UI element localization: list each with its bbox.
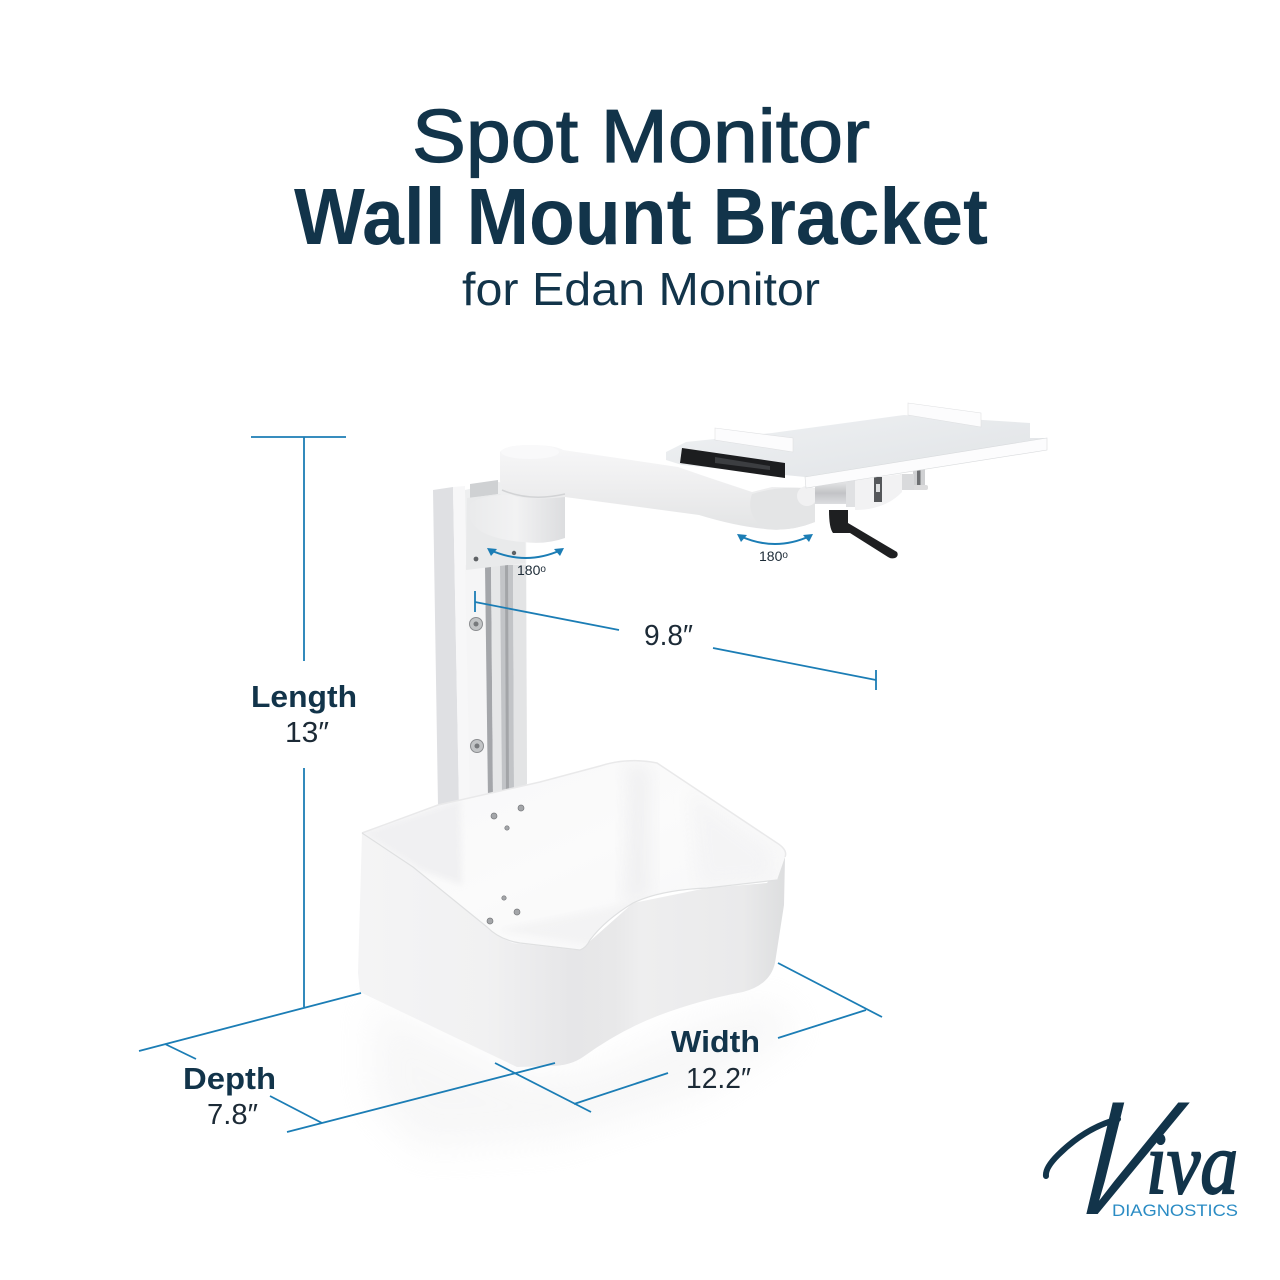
logo script wordmark V: V [1035, 1067, 1209, 1249]
interior shading [374, 781, 644, 888]
bin screws [487, 805, 524, 924]
logo script wordmark iva: iva [1146, 1116, 1238, 1213]
label: width: Width [671, 1024, 760, 1059]
rotation label: wall hub: o [540, 564, 546, 575]
cylinder end cap [797, 486, 817, 506]
lower hub [467, 493, 565, 543]
mounting plate [466, 494, 525, 570]
rotation label: arm hub: 180 [759, 548, 782, 564]
label: width [671, 1024, 760, 1095]
dimension: length [251, 437, 346, 1007]
dimension: width [495, 963, 882, 1112]
label: depth [183, 1061, 276, 1131]
label: arm reach: 9.8″ [644, 620, 693, 652]
dimension: arm reach [475, 591, 876, 690]
label: length: Length [251, 679, 357, 714]
subheading: for Edan Monitor: for Edan Monitor [462, 263, 820, 315]
heading: Spot Monitor: Spot Monitor [412, 94, 870, 178]
logo decorative swash [1046, 1119, 1118, 1176]
rotation arrow: arm hub [737, 534, 813, 544]
arm body [500, 445, 815, 530]
label: depth: 7.8″ [207, 1099, 258, 1131]
rail screws [470, 618, 484, 752]
bin interior [362, 761, 786, 950]
bin exterior [358, 833, 785, 1067]
clamp assembly [815, 469, 928, 510]
wall rail [433, 480, 527, 806]
clamp slot [874, 477, 882, 502]
rear bumper [908, 403, 981, 427]
label: length [251, 679, 357, 749]
bin rim [362, 761, 786, 857]
chrome shaft [815, 482, 849, 504]
rotation label: arm hub: o [782, 550, 788, 561]
heading: Wall Mount Bracket: Wall Mount Bracket [294, 172, 988, 261]
product: floor shadow under bin [372, 1000, 800, 1150]
swing arm [467, 445, 817, 543]
front bumper [715, 428, 793, 452]
tray body [666, 415, 1047, 488]
rotation arrow: wall hub [487, 548, 564, 558]
label: depth: Depth [183, 1061, 276, 1096]
tray front lip [805, 438, 1047, 488]
logo tagline: DIAGNOSTICS [1112, 1201, 1238, 1220]
locking pin [913, 469, 925, 487]
locking handle [829, 510, 898, 558]
storage bin [358, 761, 786, 1067]
top hub highlight [501, 445, 559, 459]
label: length: 13″ [285, 717, 329, 749]
far cylinder [750, 488, 815, 530]
hub seam [502, 490, 565, 497]
logo: Viva Diagnostics [1035, 1067, 1238, 1249]
mounting tray [666, 403, 1047, 488]
title [294, 94, 988, 315]
label: width: 12.2″ [686, 1063, 751, 1095]
black gasket [680, 448, 785, 478]
clamp body [855, 474, 902, 510]
rotation label: wall hub: 180 [517, 562, 540, 578]
dimension: depth [139, 993, 555, 1132]
